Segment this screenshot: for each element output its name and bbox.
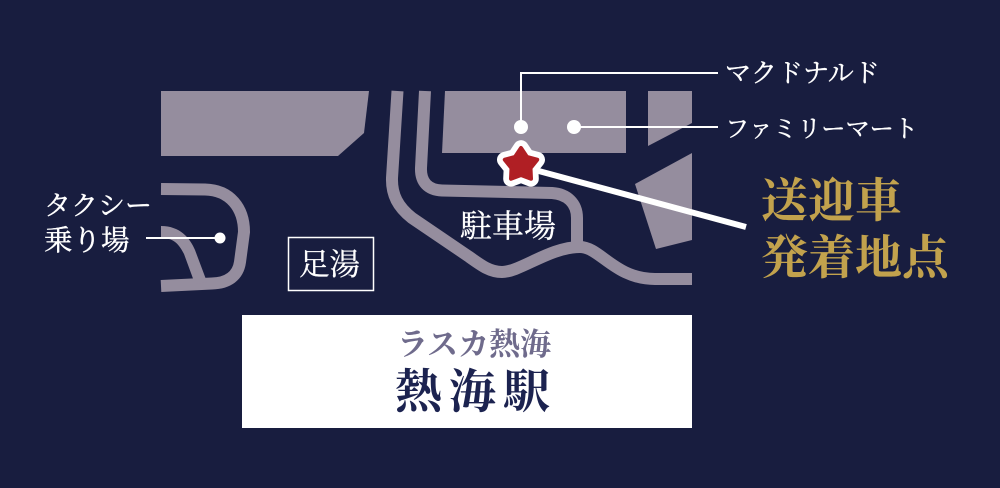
icon: red star marker [505, 148, 537, 179]
label box: foot bath [288, 238, 374, 290]
label: taxi stand [44, 191, 152, 257]
station panel: ラスカ熱海 [397, 327, 551, 362]
leader: FamilyMart [567, 120, 718, 134]
leader: taxi stand [146, 232, 226, 244]
building blocks [161, 91, 692, 249]
label: pick-up point [761, 176, 952, 285]
label: McDonald's: マクドナルド [725, 59, 880, 88]
label box: foot bath: 足湯 [299, 248, 360, 282]
label: taxi stand: 乗り場 [44, 225, 130, 257]
label: FamilyMart: ファミリーマート [725, 116, 918, 143]
leader: McDonald's [514, 73, 718, 134]
label: pick-up point: 発着地点 [761, 233, 952, 285]
roads [161, 91, 692, 286]
station panel [242, 315, 692, 428]
label: parking: 駐車場 [459, 208, 556, 244]
station panel: 熱海駅 [395, 367, 557, 419]
label: pick-up point: 送迎車 [761, 176, 902, 228]
taxi road wedge [161, 226, 207, 284]
leader: pick-up point [535, 170, 746, 227]
label: taxi stand: タクシー [44, 191, 152, 221]
